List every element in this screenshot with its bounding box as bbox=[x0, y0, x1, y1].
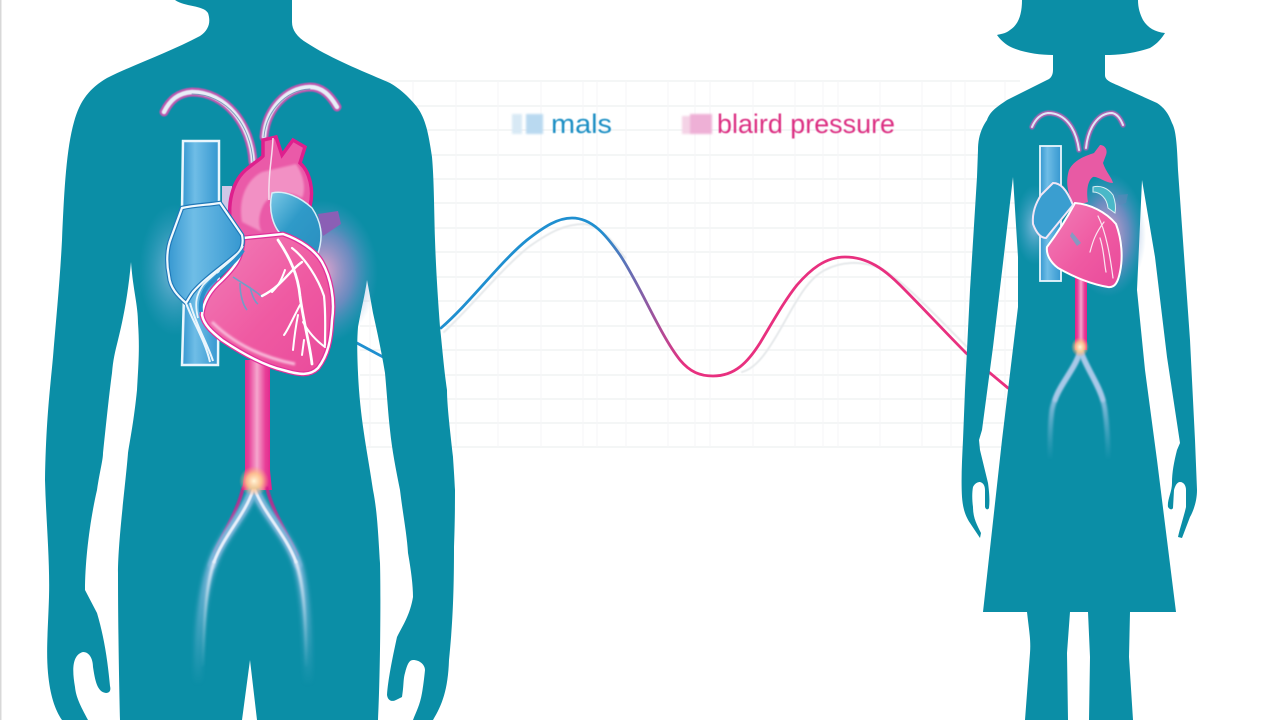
iliac left pink bbox=[215, 488, 243, 552]
iliac branches bbox=[198, 488, 308, 685]
wave left tail bbox=[355, 342, 383, 357]
female junction glow bbox=[1071, 337, 1089, 357]
female blue vein patch bbox=[1070, 232, 1081, 246]
glow left bbox=[139, 204, 211, 336]
iliac arteries upper glow bbox=[212, 490, 253, 565]
superior vena cava tube bbox=[182, 141, 219, 365]
female small purple marks bbox=[1118, 194, 1128, 205]
blue overlay strip bbox=[201, 250, 243, 312]
female lower heart bbox=[1047, 203, 1122, 287]
legend swatch: blue bbox=[512, 114, 543, 134]
wave shadow bbox=[444, 224, 970, 372]
nerve line bbox=[269, 138, 273, 200]
lower aorta bbox=[242, 360, 272, 490]
right branch artery bbox=[264, 87, 337, 137]
legend: males and blood pressure bbox=[512, 109, 895, 139]
iliac right pink bbox=[267, 488, 297, 555]
female glow left bbox=[1015, 185, 1055, 265]
lavender stub bbox=[222, 186, 232, 210]
left branch artery bbox=[164, 92, 253, 162]
chart: background grid bbox=[360, 81, 1020, 447]
figure: male silhouette bbox=[45, 0, 455, 720]
male heart illustration bbox=[139, 87, 378, 685]
left atrium blue bbox=[271, 192, 321, 256]
chart: blood pressure wave bbox=[355, 218, 1008, 388]
female vena cava bbox=[1040, 146, 1061, 281]
coronary arteries white bbox=[262, 240, 325, 364]
iliac arteries core bbox=[214, 490, 253, 562]
aorta bbox=[230, 137, 312, 240]
figure: female silhouette bbox=[962, 0, 1197, 720]
lower heart bbox=[202, 234, 333, 374]
female coronary bbox=[1090, 216, 1113, 278]
heart inner highlight bbox=[212, 322, 295, 364]
wave line bbox=[441, 218, 1008, 388]
female heart illustration bbox=[1015, 113, 1146, 458]
vein sweep bbox=[186, 303, 213, 362]
female lower aorta bbox=[1075, 275, 1087, 350]
aorta highlight bbox=[241, 164, 304, 232]
glow behind heart bbox=[266, 200, 378, 344]
right atrium bbox=[167, 203, 243, 303]
female aorta bbox=[1067, 145, 1113, 206]
legend label: pink: blaird pressure bbox=[717, 109, 895, 139]
iliac arteries blue glow bbox=[198, 490, 253, 680]
artery branches bbox=[164, 87, 337, 162]
junction glow bbox=[239, 466, 269, 496]
purple stub bbox=[318, 211, 341, 236]
legend swatch: pink bbox=[682, 114, 712, 134]
female left atrium bbox=[1093, 186, 1116, 213]
female iliac arteries bbox=[1050, 352, 1108, 458]
female right atrium bbox=[1033, 183, 1073, 238]
female branch arteries bbox=[1032, 113, 1123, 150]
legend label: blue: mals bbox=[551, 109, 612, 139]
female glow bbox=[1070, 173, 1146, 297]
coronary veins blue bbox=[233, 277, 262, 310]
